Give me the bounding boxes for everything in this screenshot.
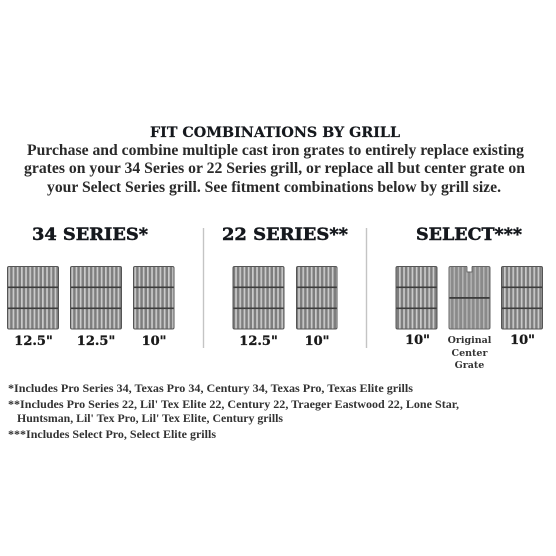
center grate label: Center <box>452 348 488 359</box>
grate: 22 series 12.5 inch <box>233 266 284 329</box>
size labels: 12.5" <box>14 334 53 349</box>
center grate label: Grate <box>455 360 484 371</box>
intro paragraph: Purchase and combine multiple cast iron grates to entirely replace existing <box>27 142 524 159</box>
grate: original center grate <box>449 266 490 329</box>
size labels: 10" <box>142 334 166 349</box>
footnotes <box>8 383 459 441</box>
grate: 34 series 12.5 inch left <box>8 266 58 329</box>
grate: select 10 inch left <box>396 266 437 329</box>
size labels <box>14 333 535 349</box>
size labels: 12.5" <box>239 334 278 349</box>
grate: 34 series 12.5 inch middle <box>70 266 122 329</box>
size labels: 12.5" <box>77 334 115 349</box>
heading: 34 series: 34 SERIES* <box>32 225 148 245</box>
intro paragraph <box>24 142 525 196</box>
heading: select: SELECT*** <box>416 225 522 245</box>
grate: 34 series 10 inch <box>134 266 174 329</box>
size labels: 10" <box>405 333 430 348</box>
footnotes: *Includes Pro Series 34, Texas Pro 34, Century 34, Texas Pro, Texas Elite grills <box>8 383 414 395</box>
intro paragraph: grates on your 34 Series or 22 Series grill, or replace all but center grate on <box>24 160 525 177</box>
size labels: 10" <box>305 334 329 349</box>
footnotes: **Includes Pro Series 22, Lil' Tex Elite 22, Century 22, Traeger Eastwood 22, Lone Star, <box>8 399 459 411</box>
size labels: 10" <box>510 333 535 348</box>
grate: select 10 inch right <box>502 266 542 329</box>
footnotes: Huntsman, Lil' Tex Pro, Lil' Tex Elite, Century grills <box>17 413 284 425</box>
footnotes: ***Includes Select Pro, Select Elite grills <box>8 429 217 441</box>
center grate label: Original <box>448 335 492 346</box>
title: FIT COMBINATIONS BY GRILL <box>150 125 400 141</box>
grate: 22 series 10 inch <box>296 266 337 329</box>
heading: 22 series: 22 SERIES** <box>222 225 348 245</box>
center grate label <box>448 335 492 371</box>
intro paragraph: your Select Series grill. See fitment combinations below by grill size. <box>47 179 501 196</box>
